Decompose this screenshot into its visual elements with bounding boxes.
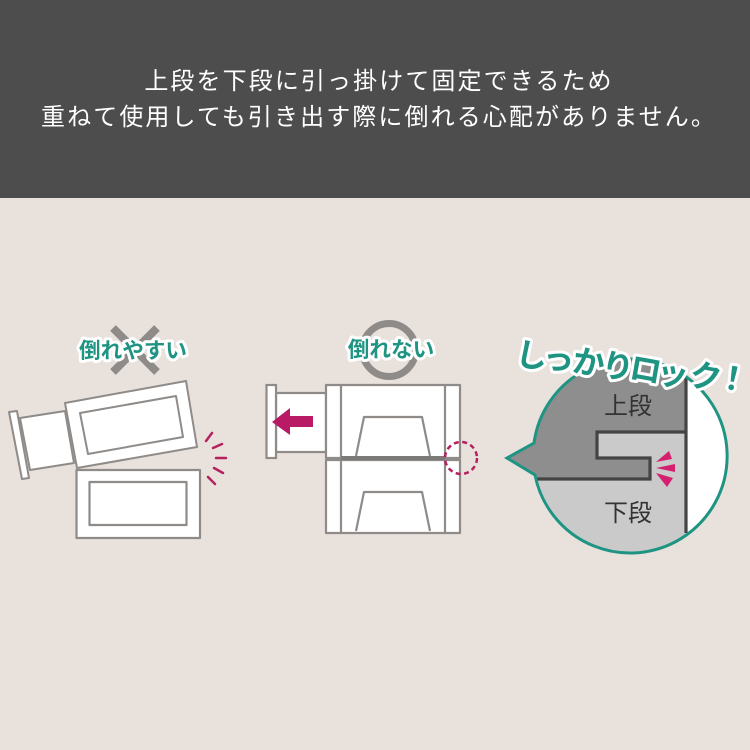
text: upper section: 上段 <box>604 393 652 420</box>
label: falls easily: 倒れやすい <box>79 338 187 363</box>
detail callout: lock <box>507 335 750 553</box>
text: lower section: 下段 <box>604 500 652 527</box>
lower section fill <box>536 432 686 552</box>
impact wedges <box>656 451 675 487</box>
icon: circle mark <box>362 324 416 376</box>
impact marks <box>206 433 226 484</box>
header text line 1: 上段を下段に引っ掛けて固定できるため <box>144 68 614 95</box>
diagram: unstable stack <box>9 328 226 538</box>
dashed circle: lock position <box>445 442 477 474</box>
upper box <box>326 385 460 458</box>
section outlines <box>537 378 686 533</box>
heading: locks firmly: しっかりロック！ <box>513 335 750 399</box>
label: does not fall: 倒れない <box>348 337 434 362</box>
header text line 2: 重ねて使用しても引き出す際に倒れる心配がありません。 <box>41 104 717 131</box>
tilted upper box <box>65 381 197 468</box>
callout outline <box>507 359 727 553</box>
tilted drawer <box>9 411 74 479</box>
icon: cross mark <box>113 328 157 372</box>
lower box <box>76 470 200 538</box>
drawer pulled out <box>266 385 326 458</box>
diagram: stable stack <box>266 324 477 533</box>
header band <box>0 0 750 198</box>
callout bubble <box>533 358 727 552</box>
lower box <box>326 460 460 533</box>
arrow: pull direction <box>272 408 313 435</box>
divider between boxes <box>341 456 445 460</box>
upper section fill <box>507 358 686 479</box>
